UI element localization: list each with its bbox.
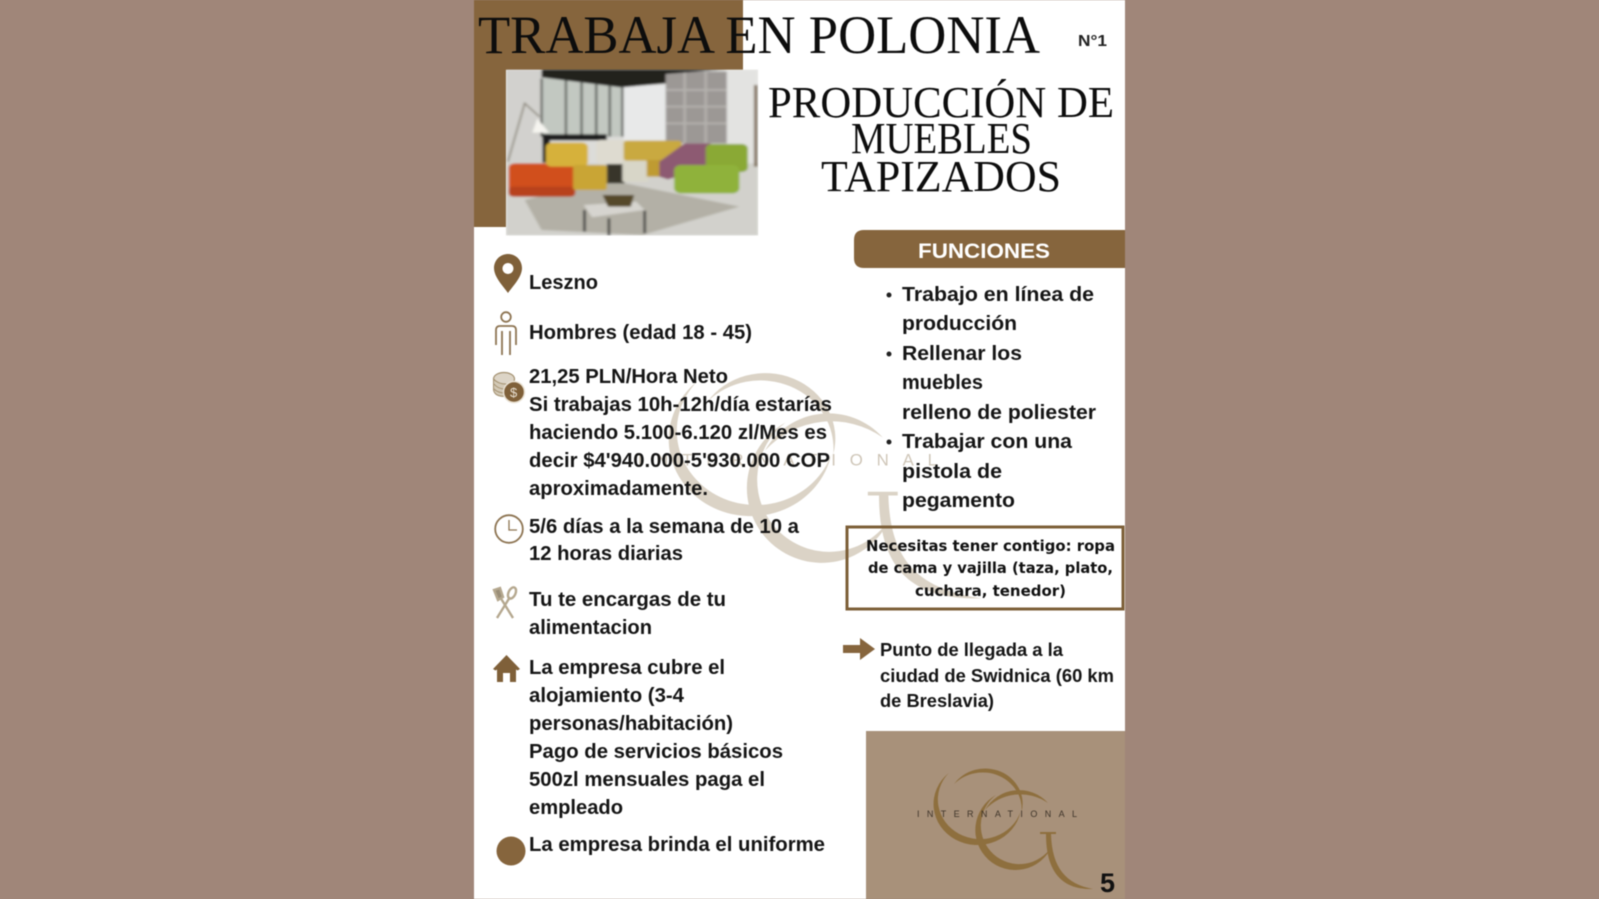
text: food: Tu te encargas de tu bbox=[529, 589, 726, 611]
text: food: alimentacion bbox=[529, 617, 652, 639]
brown header block bbox=[474, 0, 743, 227]
icon: clock bbox=[495, 515, 523, 543]
heading: job title: PRODUCCIÓN DE bbox=[768, 78, 1114, 127]
heading: job title: TAPIZADOS bbox=[821, 152, 1061, 201]
icon: coins: $ bbox=[510, 385, 518, 400]
text: arrival point: ciudad de Swidnica (60 km bbox=[880, 666, 1114, 686]
text: uniform: La empresa brinda el uniforme bbox=[529, 834, 825, 856]
logo: OG International bbox=[917, 769, 1093, 889]
icon: uniform circle bbox=[496, 836, 526, 866]
callout: what to bring bbox=[847, 527, 1123, 609]
funciones header bbox=[854, 230, 1125, 268]
text: schedule: 5/6 días a la semana de 10 a bbox=[529, 516, 800, 538]
callout: what to bring: Necesitas tener contigo: ropa bbox=[866, 537, 1115, 555]
text: salary: decir $4'940.000-5'930.000 COP bbox=[529, 450, 830, 472]
text: housing: personas/habitación) bbox=[529, 713, 733, 735]
text: food bbox=[529, 589, 726, 639]
infographic page bbox=[473, 0, 1126, 899]
functions list: producción bbox=[902, 313, 1017, 335]
icon: fork and knife bbox=[494, 586, 518, 618]
text: arrival point: de Breslavia) bbox=[880, 691, 994, 711]
functions list: relleno de poliester bbox=[902, 402, 1096, 424]
logo: OG International: INTERNATIONAL bbox=[917, 809, 1077, 819]
watermark logo bbox=[638, 373, 982, 598]
text: salary: Si trabajas 10h-12h/día estarías bbox=[529, 394, 832, 416]
callout: what to bring: cuchara, tenedor) bbox=[915, 582, 1066, 600]
text: salary: haciendo 5.100-6.120 zl/Mes es bbox=[529, 422, 827, 444]
text: salary: aproximadamente. bbox=[529, 478, 708, 500]
text: arrival point: Punto de llegada a la bbox=[880, 640, 1064, 660]
text: housing: La empresa cubre el bbox=[529, 657, 725, 679]
callout: what to bring: de cama y vajilla (taza, plato, bbox=[868, 559, 1113, 577]
text: housing bbox=[529, 657, 783, 819]
functions list: Trabajo en línea de bbox=[902, 284, 1094, 306]
text: housing: 500zl mensuales paga el bbox=[529, 769, 765, 791]
text: arrival point bbox=[880, 640, 1114, 711]
arrow bbox=[843, 638, 875, 660]
functions list: Trabajar con una bbox=[902, 431, 1073, 453]
text: housing: Pago de servicios básicos bbox=[529, 741, 783, 763]
issue number: N°1 bbox=[1078, 33, 1107, 50]
text: location: Leszno bbox=[529, 272, 598, 294]
functions list: pistola de bbox=[902, 461, 1002, 483]
heading: job title: MUEBLES bbox=[851, 114, 1032, 163]
text: workers: Hombres (edad 18 - 45) bbox=[529, 322, 752, 344]
text: salary: 21,25 PLN/Hora Neto bbox=[529, 366, 728, 388]
page number: 5 bbox=[1100, 868, 1115, 898]
icon: person bbox=[496, 312, 516, 355]
icon: coins bbox=[494, 372, 524, 402]
text: schedule: 12 horas diarias bbox=[529, 543, 683, 565]
functions list: pegamento bbox=[902, 490, 1015, 512]
icon: location pin bbox=[494, 254, 522, 293]
text: housing: empleado bbox=[529, 797, 623, 819]
text: salary bbox=[529, 366, 832, 500]
functions list: Rellenar los bbox=[902, 343, 1022, 365]
panel: logo block bbox=[866, 731, 1125, 899]
funciones header: FUNCIONES bbox=[918, 240, 1050, 263]
main title: TRABAJA EN POLONIA bbox=[478, 5, 1040, 65]
functions list: muebles bbox=[902, 372, 983, 394]
white sheet bbox=[474, 0, 1125, 899]
heading: job title bbox=[768, 78, 1114, 201]
photo: living room with colourful sofa bbox=[506, 69, 758, 236]
watermark logo: INTERNATIONAL bbox=[638, 451, 937, 470]
text: housing: alojamiento (3-4 bbox=[529, 685, 685, 707]
functions list bbox=[886, 284, 1096, 512]
icon: house bbox=[493, 655, 520, 682]
text: schedule bbox=[529, 516, 800, 565]
